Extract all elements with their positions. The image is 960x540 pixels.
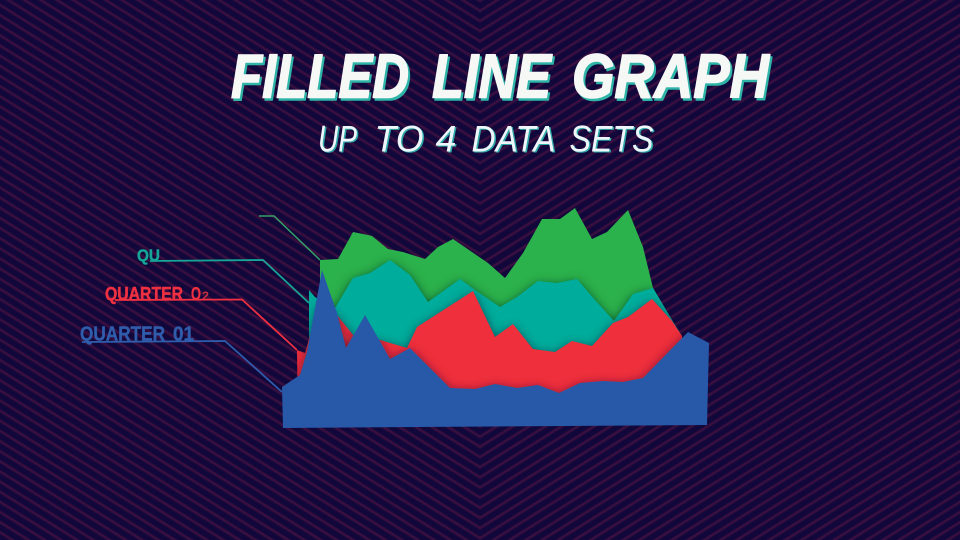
subtitle: SETS — [571, 120, 655, 160]
title: GRAPH — [574, 45, 772, 114]
subtitle: TO — [374, 118, 424, 160]
legend label: quarter 03: QU — [137, 246, 160, 265]
subtitle — [318, 118, 655, 160]
legend label: quarter 02 — [105, 284, 297, 350]
subtitle: TO — [376, 120, 425, 160]
data series: quarter 04 green area — [320, 208, 672, 321]
legend label: quarter 03 — [137, 246, 309, 303]
legend label: quarter 02: 2 — [202, 289, 209, 303]
legend label: quarter 02: QUARTER — [105, 284, 183, 304]
subtitle: SETS — [570, 118, 654, 160]
title: FILLED — [231, 42, 409, 112]
subtitle: DATA — [473, 120, 557, 160]
legend label: quarter 01: 01 — [173, 324, 194, 346]
title: FILLED — [233, 45, 411, 114]
subtitle: UP — [320, 120, 359, 160]
title: LINE — [432, 42, 552, 112]
subtitle: 4 — [437, 120, 458, 160]
title: LINE — [434, 45, 554, 114]
data series: quarter 03 teal area — [309, 260, 682, 352]
subtitle: UP — [318, 118, 357, 160]
subtitle: DATA — [472, 118, 556, 160]
data series: quarter 01 blue area — [282, 270, 709, 428]
legend label: quarter 01: QUARTER — [80, 324, 165, 346]
legend label: quarter 01 — [80, 324, 282, 392]
subtitle: 4 — [436, 118, 456, 160]
title — [231, 42, 772, 114]
filled line chart — [282, 208, 709, 431]
legend label: quarter 04 leader line — [259, 216, 320, 260]
data series: quarter 02 red area — [297, 291, 682, 393]
title: GRAPH — [572, 42, 770, 112]
legend label: quarter 02: O — [191, 284, 201, 304]
